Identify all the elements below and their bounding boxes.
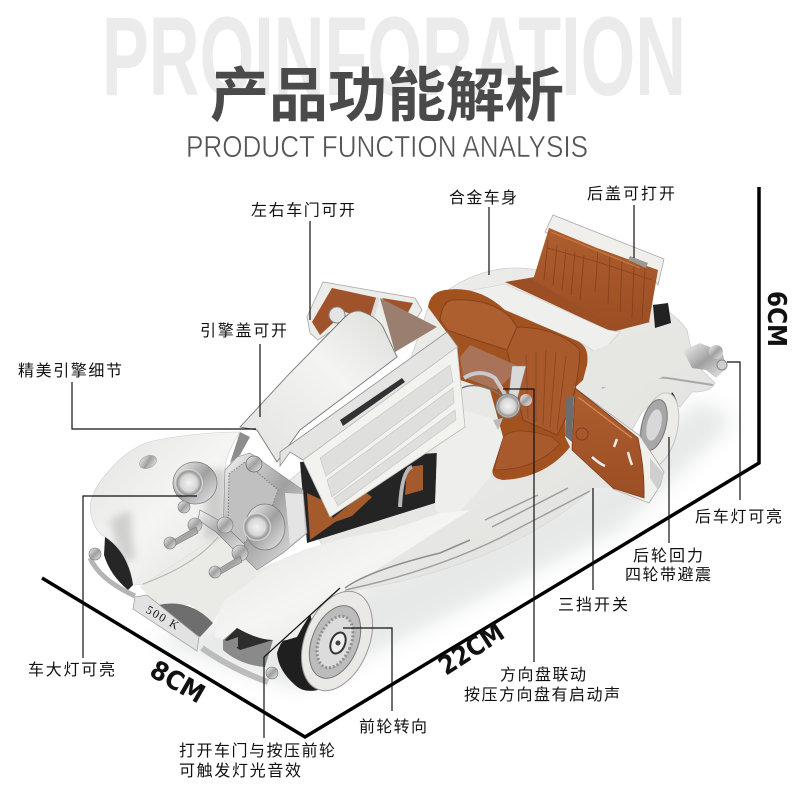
subtitle: PRODUCT FUNCTION ANALYSIS [186, 129, 588, 164]
rear lamp cluster [683, 343, 727, 378]
rear deck panel [462, 284, 620, 355]
floor shadow [150, 400, 735, 690]
bonnet chrome edge [280, 332, 458, 466]
dimension: height 6CM: 6CM [761, 291, 791, 347]
windscreen glass [380, 298, 437, 352]
lower front body side [330, 410, 612, 592]
callout: pull-back and suspension: 四轮带避震 [625, 566, 711, 584]
rear fender highlight [602, 377, 713, 388]
lamp bar and horns [164, 501, 248, 578]
door behind bonnet [307, 282, 422, 355]
windscreen glass over seat [460, 345, 520, 390]
left arch tyre [104, 537, 133, 590]
callout: engine detail [18, 362, 256, 429]
callout: bonnet opens [200, 322, 287, 417]
callout: doors open [251, 202, 355, 320]
front seat right [507, 327, 580, 435]
engine leather parts [307, 465, 423, 540]
callout: doors open: 左右车门可开 [251, 202, 355, 220]
callout: front wheel steering: 前轮转向 [359, 718, 427, 736]
centre nose [140, 537, 280, 622]
callout: alloy body [449, 189, 517, 275]
front seat left [440, 300, 517, 350]
right lower recess [223, 628, 273, 667]
callout: door and wheel trigger: 可触发灯光音效 [179, 762, 301, 780]
front bumper [89, 548, 278, 682]
hinge detail [628, 256, 648, 268]
callout: pull-back and suspension: 后轮回力 [633, 547, 703, 565]
rear trunk lid leather [533, 228, 658, 328]
left fender seam [143, 537, 218, 584]
spare tyre [653, 303, 671, 328]
callout: three-speed switch [558, 488, 628, 614]
left front fender [90, 432, 240, 585]
headlamp right [243, 504, 285, 550]
callout: engine detail: 精美引擎细节 [18, 362, 122, 380]
callout: alloy body: 合金车身 [449, 189, 517, 207]
callout: headlights [28, 496, 197, 679]
lower valence [158, 603, 213, 637]
fender trim line [345, 540, 470, 588]
callout: door and wheel trigger: 打开车门与按压前轮 [179, 742, 335, 760]
chrome radiator grille [223, 453, 307, 570]
opened bonnet panel [240, 311, 397, 462]
rear seat base [505, 277, 650, 332]
dimension: width 8CM: 8CM [144, 655, 210, 710]
engine bay [300, 453, 437, 543]
seat cushion [494, 431, 560, 470]
rear wheel [632, 389, 686, 471]
front wheel [277, 581, 386, 701]
title: 产品功能解析 [210, 63, 564, 129]
headlamp left [173, 462, 217, 504]
callout: steering wheel: 方向盘联动 [500, 665, 586, 684]
dimension: length 22CM: 22CM [433, 617, 510, 682]
callout: door and wheel trigger [179, 588, 340, 780]
callout: rear lid opens [587, 185, 675, 258]
side chrome trim [345, 488, 590, 590]
right front fender [215, 510, 470, 644]
side lamp [493, 394, 532, 430]
windscreen chrome frame [462, 366, 526, 404]
callout: steering wheel [464, 389, 620, 704]
bonnet louvre panel [303, 347, 465, 517]
fender bolts [137, 453, 324, 573]
open side door [572, 388, 664, 503]
callout: pull-back and suspension [625, 437, 711, 584]
callout: steering wheel: 按压方向盘有启动声 [464, 685, 620, 704]
fender shading [110, 470, 226, 560]
callout: rear lid opens: 后盖可打开 [587, 185, 675, 203]
dimension lines [42, 187, 759, 737]
rear trunk lid frame [545, 215, 664, 285]
door hinge [565, 396, 574, 442]
callout: tail lights: 后车灯可亮 [695, 508, 782, 526]
callout: tail lights [695, 362, 782, 526]
number plate [133, 595, 199, 651]
number plate: 500 K [144, 602, 183, 633]
rear body [290, 268, 715, 592]
front seat tub [428, 289, 588, 480]
callout: front wheel steering [343, 628, 427, 736]
car model [89, 215, 727, 701]
callout: bonnet opens: 引擎盖可开 [200, 322, 287, 340]
bonnet hinge dark [230, 432, 250, 463]
engine chrome pipe [400, 467, 412, 507]
white side panel beside bay [435, 410, 503, 520]
callout: three-speed switch: 三挡开关 [558, 596, 628, 614]
callout: headlights: 车大灯可亮 [28, 661, 115, 679]
